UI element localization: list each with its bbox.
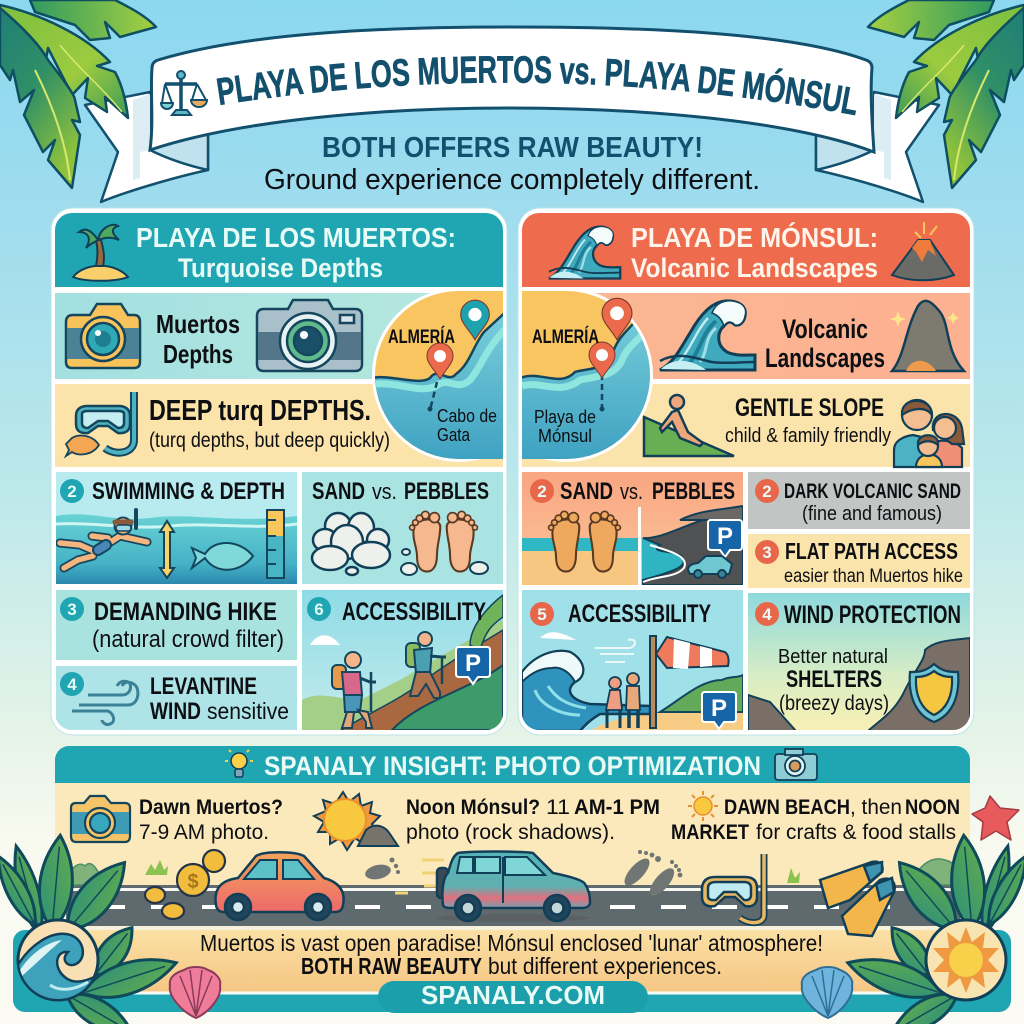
- panel: dark volcanic sand: DARK VOLCANIC SAND: [784, 480, 961, 503]
- text: noon Mónsul: Noon Mónsul?: [406, 796, 540, 819]
- panel: Playa de los Muertos: [51, 208, 546, 735]
- panel: dark volcanic sand: (fine and famous): [802, 503, 942, 525]
- panel header: [55, 213, 503, 287]
- icon: yellow camera: [66, 304, 140, 368]
- text: dawn beach market: , then: [850, 796, 902, 819]
- icon: depth ruler: [267, 510, 284, 578]
- text: dawn beach market: MARKET: [671, 821, 749, 844]
- row: Muertos Depths: Muertos: [156, 309, 240, 339]
- panel header: PLAYA DE MÓNSUL:: [631, 222, 878, 253]
- icon: coins: $: [187, 871, 199, 893]
- bottom text: but different experiences.: [488, 953, 722, 979]
- icon: wave: [549, 227, 620, 278]
- icon: scales: [161, 71, 207, 115]
- map: Almería Cabo de Gata: [372, 291, 503, 462]
- row: Volcanic Landscapes: Landscapes: [765, 343, 885, 373]
- icon: camera: [775, 749, 817, 780]
- panel: accessibility left: [302, 590, 503, 731]
- icon: car: [688, 556, 732, 578]
- icon: coast and dark rocks: [643, 506, 743, 585]
- subtitle: Ground experience completely different.: [264, 164, 760, 196]
- panel: accessibility right: [522, 590, 743, 731]
- panel: demanding hike: 3: [67, 600, 77, 619]
- icon: bare feet: [410, 511, 477, 572]
- palm leaves top right: [868, 0, 1024, 188]
- icon: footprint: [364, 858, 400, 882]
- badge 2: 2: [67, 482, 77, 501]
- icon: palm island: [73, 225, 128, 281]
- icon: pebbles: [312, 513, 390, 575]
- icon: coins: [145, 850, 225, 919]
- icon: sparkles: [890, 311, 959, 327]
- panel: swimming and depth: SWIMMING & DEPTH: [92, 478, 285, 505]
- row: Gentle slope: GENTLE SLOPE: [735, 394, 884, 422]
- subtitle: BOTH OFFERS RAW BEAUTY!: [322, 132, 703, 164]
- panel: wind protection: WIND PROTECTION: [784, 601, 961, 629]
- icon: person sliding on slope: [644, 395, 734, 456]
- panel: sand vs pebbles: PEBBLES: [404, 478, 489, 505]
- text: noon Mónsul: [406, 796, 660, 844]
- banner ribbon: [150, 27, 874, 152]
- panel: sand vs pebbles: vs.: [372, 479, 397, 504]
- icon: bulb: [225, 750, 253, 777]
- panel: wind protection: SHELTERS: [786, 666, 882, 693]
- icon: wind: [72, 681, 138, 725]
- text: dawn beach market: [671, 796, 960, 844]
- icon: blue shell: [802, 967, 852, 1018]
- map: Almería Playa de Mónsul: Mónsul: [538, 426, 592, 446]
- icon: small sun: [688, 791, 718, 821]
- footer pill: [378, 980, 648, 1013]
- row: Gentle slope: child & family friendly: [725, 425, 891, 447]
- icon: mask and snorkel: [702, 854, 764, 923]
- icon: depth arrow: [160, 521, 174, 578]
- row: Volcanic Landscapes: [595, 293, 970, 379]
- icon: sun with rock: [314, 792, 398, 850]
- icon: swimmer: [60, 510, 147, 568]
- panel: wind protection: Better natural: [778, 646, 888, 668]
- icon: footprints: [620, 850, 682, 900]
- row: Muertos Depths: [55, 293, 430, 379]
- panel header: Turquoise Depths: [178, 253, 383, 283]
- panel: sand vs pebbles: SAND: [312, 478, 365, 505]
- panel: sand vs pebbles right: vs.: [620, 479, 643, 504]
- panel: flat path access: easier than Muertos hike: [784, 566, 963, 587]
- panel header: PLAYA DE LOS MUERTOS:: [136, 222, 456, 253]
- panel header: Volcanic Landscapes: [631, 253, 878, 283]
- icon: speed lines: [395, 860, 444, 893]
- bottom sand and teal base: [13, 930, 1011, 1012]
- panel: levantine wind: 4: [67, 675, 77, 694]
- row: Deep turq depths: (turq depths, but deep quickly): [149, 429, 390, 452]
- row: Volcanic Landscapes: Volcanic: [782, 314, 868, 344]
- bottom text: [200, 930, 823, 979]
- panel: sand vs pebbles right: [522, 472, 743, 585]
- panel: levantine wind: sensitive: [207, 698, 289, 724]
- row: Deep turq depths: DEEP turq DEPTHS.: [149, 395, 371, 427]
- map: Almería Playa de Mónsul: Playa de: [534, 407, 596, 427]
- text: noon Mónsul: 11: [546, 796, 570, 819]
- icon: hiker back: [406, 632, 446, 698]
- icon: wave: [660, 301, 755, 370]
- panel: sand vs pebbles: [302, 472, 503, 584]
- road: [66, 859, 960, 930]
- panel: demanding hike: DEMANDING HIKE: [94, 598, 277, 626]
- text: dawn beach market: DAWN BEACH: [724, 796, 850, 819]
- panel: sand vs pebbles right: SAND: [560, 478, 613, 505]
- panel: sand vs pebbles right: PEBBLES: [652, 478, 735, 505]
- title: [219, 82, 860, 116]
- map: Almería Cabo de Gata: Cabo de: [437, 406, 497, 426]
- icon: hiker front: [332, 652, 376, 728]
- icon: volcano: [892, 222, 954, 280]
- text: dawn Muertos: Dawn Muertos?: [139, 796, 283, 819]
- panel: sand vs pebbles right: 2: [537, 482, 547, 501]
- map: Almería Cabo de Gata: Gata: [437, 425, 471, 445]
- bottom right leaves: [843, 834, 1024, 1024]
- panel: levantine wind: [56, 666, 297, 730]
- row: Gentle slope: [522, 384, 970, 467]
- text: dawn Muertos: 7-9 AM photo.: [139, 821, 269, 844]
- panel: accessibility left: 6: [314, 600, 324, 619]
- icon: two people: [606, 673, 640, 728]
- panel: wind protection: 4: [762, 605, 772, 624]
- icon: pink shell: [170, 967, 220, 1018]
- panel: flat path access: FLAT PATH ACCESS: [785, 538, 958, 564]
- bushes: [66, 859, 960, 885]
- bottom left leaves: [0, 834, 181, 1024]
- bottom text: Muertos is vast open paradise! Mónsul enclosed 'lunar' atmosphere!: [200, 930, 823, 956]
- footer pill: SPANALY.COM: [421, 980, 605, 1010]
- panel: swimming and depth: [56, 472, 297, 585]
- row: Muertos Depths: Depths: [163, 339, 233, 369]
- panel: flat path access: 3: [762, 543, 772, 562]
- panel: levantine wind: WIND: [150, 698, 201, 725]
- icon: wave medallion: [18, 920, 100, 1005]
- panel: wind protection: (breezy days): [779, 692, 889, 715]
- text: noon Mónsul: photo (rock shadows).: [406, 821, 615, 844]
- heading: insight: SPANALY INSIGHT: PHOTO OPTIMIZATION: [264, 751, 761, 781]
- icon: starfish: [972, 796, 1019, 840]
- map: Almería Cabo de Gata: ALMERÍA: [388, 326, 455, 348]
- icon: red car: [216, 852, 344, 920]
- icon: shield: [910, 664, 958, 722]
- icon: fins: [820, 862, 895, 936]
- icon: family: [894, 400, 964, 467]
- panel: dark volcanic sand: 2: [762, 482, 772, 501]
- icon: sun medallion: [926, 920, 1006, 1000]
- title banner: [148, 26, 876, 154]
- text: dawn beach market: NOON: [905, 796, 960, 819]
- panel: Playa de Mónsul: [479, 208, 974, 735]
- panel: accessibility left: ACCESSIBILITY: [342, 598, 486, 626]
- panel: levantine wind: LEVANTINE: [150, 673, 257, 700]
- icon: snorkel mask and fish: [66, 392, 134, 456]
- panel: flat path access: [748, 534, 970, 588]
- title banner: PLAYA DE LOS MUERTOS vs. PLAYA DE MÓNSUL: [216, 56, 856, 116]
- banner tails: [85, 92, 939, 202]
- badge 2: [60, 479, 84, 503]
- icon: fish: [192, 543, 253, 570]
- icon: teal car: [437, 852, 590, 922]
- panel: accessibility right: ACCESSIBILITY: [568, 600, 711, 628]
- icon: feet: [549, 511, 620, 572]
- text: dawn beach market: for crafts & food stalls: [756, 821, 956, 844]
- palm leaves top left: [0, 0, 156, 188]
- panel header: [522, 213, 970, 287]
- panel: insight: [55, 746, 1019, 893]
- icon: grey camera: [257, 300, 362, 371]
- panel: demanding hike: [56, 590, 297, 660]
- bottom text: BOTH RAW BEAUTY: [301, 953, 482, 979]
- map: Almería Playa de Mónsul: [522, 291, 653, 462]
- text: noon Mónsul: AM-1 PM: [574, 796, 660, 819]
- icon: camera dawn: [71, 796, 130, 842]
- icon: rock arch: [892, 301, 964, 371]
- icon: rocks: [748, 695, 796, 731]
- text: dawn Muertos: [139, 796, 283, 844]
- panel: dark volcanic sand: [748, 472, 970, 529]
- grass: [145, 860, 800, 883]
- panel: demanding hike: (natural crowd filter): [92, 626, 284, 653]
- panel: wind protection: [748, 593, 970, 731]
- map: Almería Playa de Mónsul: ALMERÍA: [532, 326, 599, 348]
- subtitle: [264, 132, 760, 196]
- row: Deep turq depths: [55, 384, 503, 467]
- panel: accessibility right: 5: [537, 605, 547, 624]
- icon: windsock: [650, 636, 729, 728]
